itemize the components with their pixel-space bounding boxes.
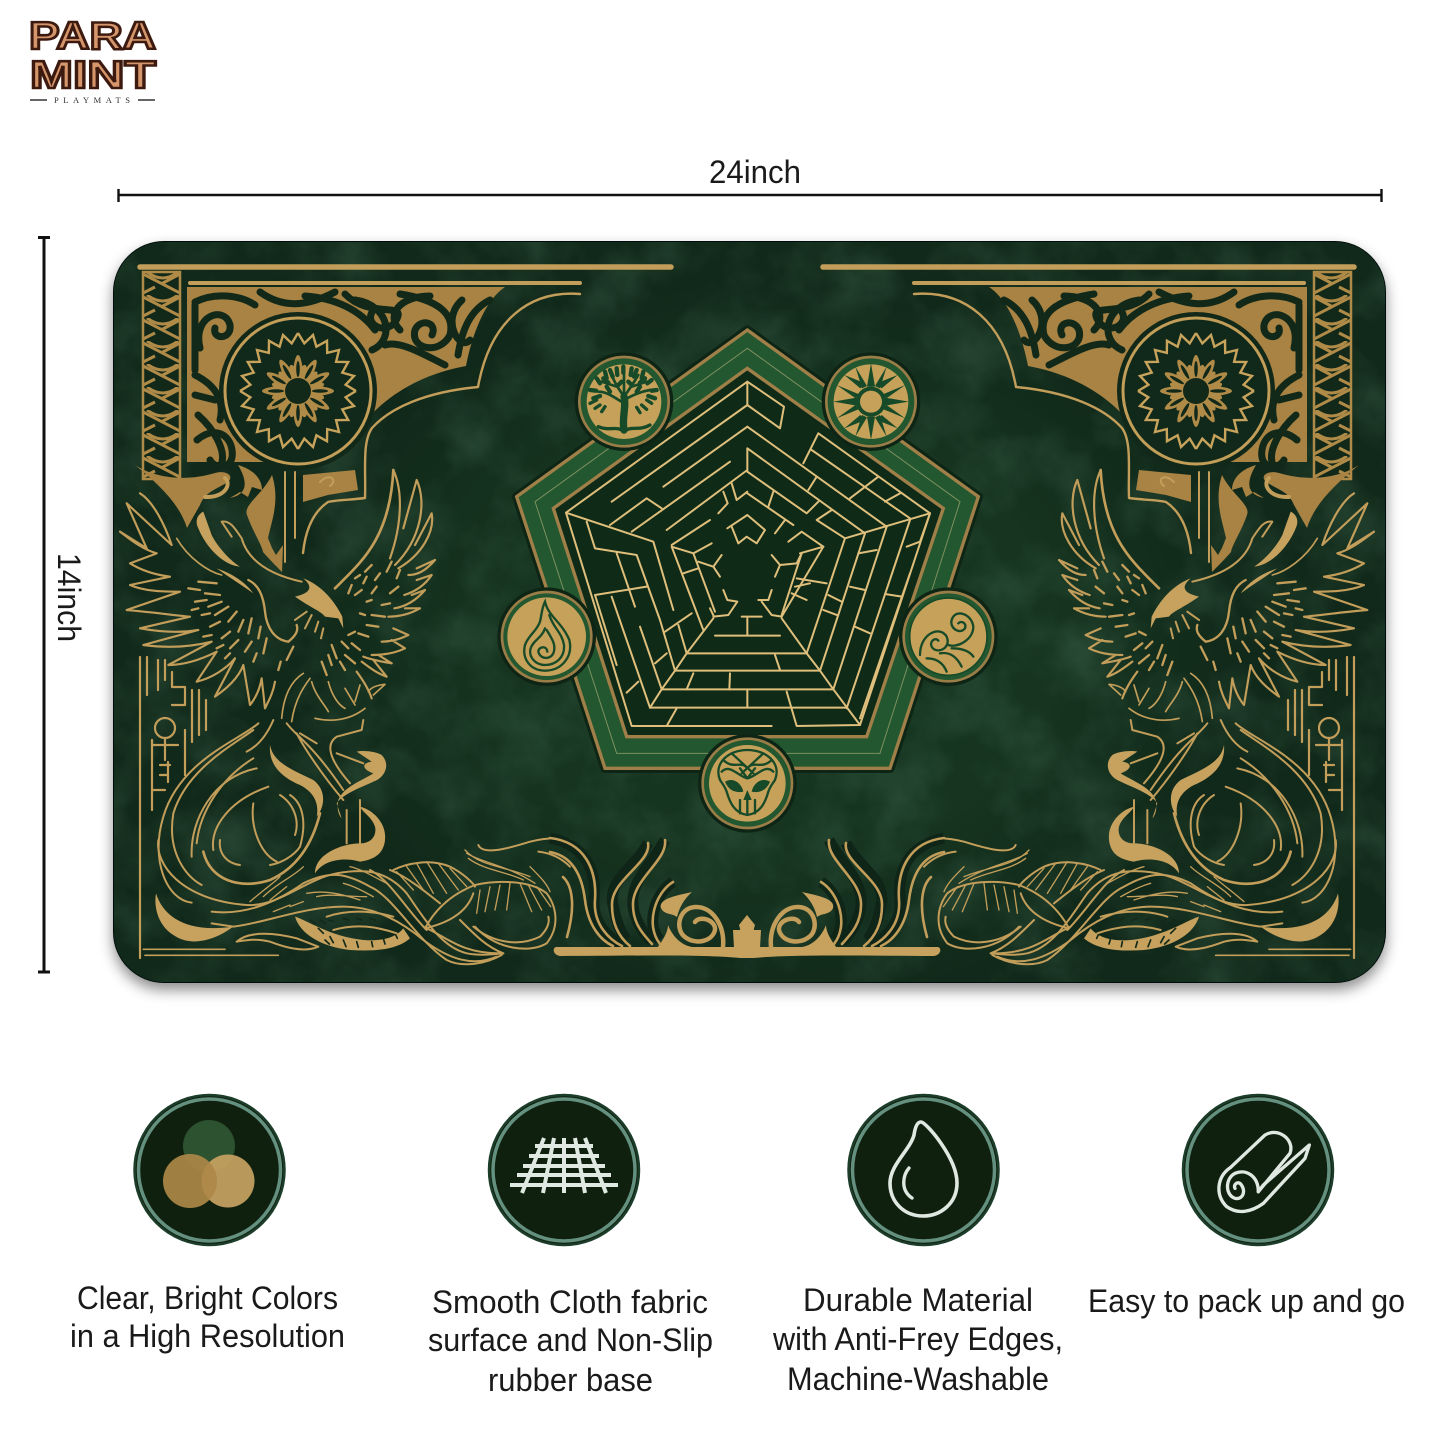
feature: colors text: Clear, Bright Colors	[77, 1280, 338, 1316]
feature: colors icon	[134, 1095, 284, 1245]
ornament: right corner mirror	[739, 267, 1374, 964]
medallion: fire	[497, 587, 596, 686]
playmat	[113, 241, 1386, 983]
top rails	[140, 264, 671, 270]
phoenix tail and ribbons	[143, 720, 570, 964]
scroll bar	[554, 947, 747, 958]
logo: Paramint Playmats	[29, 15, 156, 105]
width label: 24inch	[709, 154, 801, 190]
medallion: celtic skull	[698, 734, 797, 833]
corner spandrel	[187, 287, 505, 462]
left wing covert ticks	[188, 582, 293, 670]
feature: durable text	[772, 1282, 1063, 1397]
ornament: left corner, phoenix and scroll	[120, 267, 755, 964]
right wing arm	[335, 470, 393, 588]
feature: durable text: Durable Material	[803, 1282, 1033, 1318]
right wing feathers	[357, 470, 435, 698]
hieroglyph panel	[140, 657, 206, 958]
feature: durable text: with Anti-Frey Edges,	[772, 1321, 1063, 1357]
head	[295, 578, 343, 628]
feature: colors text	[70, 1280, 345, 1354]
width dimension arrow	[118, 154, 1382, 202]
height dimension arrow	[38, 237, 87, 973]
knot band	[143, 272, 180, 479]
bottom center scroll half	[550, 838, 755, 958]
feature: roll text: Easy to pack up and go	[1088, 1283, 1405, 1319]
phoenix	[120, 470, 435, 722]
height label: 14inch	[51, 553, 87, 642]
left wing feathers	[120, 493, 275, 708]
swirl cutouts	[195, 292, 490, 467]
feature: fabric text: rubber base	[488, 1362, 653, 1398]
feature: fabric icon	[489, 1095, 639, 1245]
pentagon frame	[517, 330, 978, 768]
corner outer edge line	[303, 294, 580, 553]
neck outline	[222, 521, 302, 582]
feather barbs	[250, 850, 551, 913]
feature: durable text: Machine-Washable	[787, 1361, 1049, 1397]
tail sweeps	[158, 720, 570, 964]
feature: fabric text: surface and Non-Slip	[428, 1322, 713, 1358]
logo word MINT: MINT	[30, 54, 156, 97]
medallion: tree of life	[575, 352, 673, 451]
feature: fabric text	[428, 1284, 713, 1398]
feature: colors text: in a High Resolution	[70, 1318, 345, 1354]
legs and lower body	[282, 673, 385, 722]
medallion: wind	[899, 587, 998, 686]
feature: durable icon	[848, 1095, 998, 1245]
scroll leaf and swirl	[661, 892, 692, 917]
wing arm and crescent	[197, 512, 240, 567]
lower corner spikes and flames	[135, 465, 230, 528]
medallion: sun	[822, 352, 920, 451]
center pentagon labyrinth	[497, 330, 998, 833]
mandala medallion	[219, 312, 377, 470]
maze walls	[566, 382, 930, 726]
feature: fabric text: Smooth Cloth fabric	[432, 1284, 708, 1320]
logo word PARA: PARA	[29, 15, 156, 58]
right wing covert ticks	[322, 562, 400, 675]
tail crescents	[155, 893, 233, 941]
logo tagline: PLAYMATS	[54, 95, 130, 105]
feature: roll icon	[1183, 1095, 1333, 1245]
